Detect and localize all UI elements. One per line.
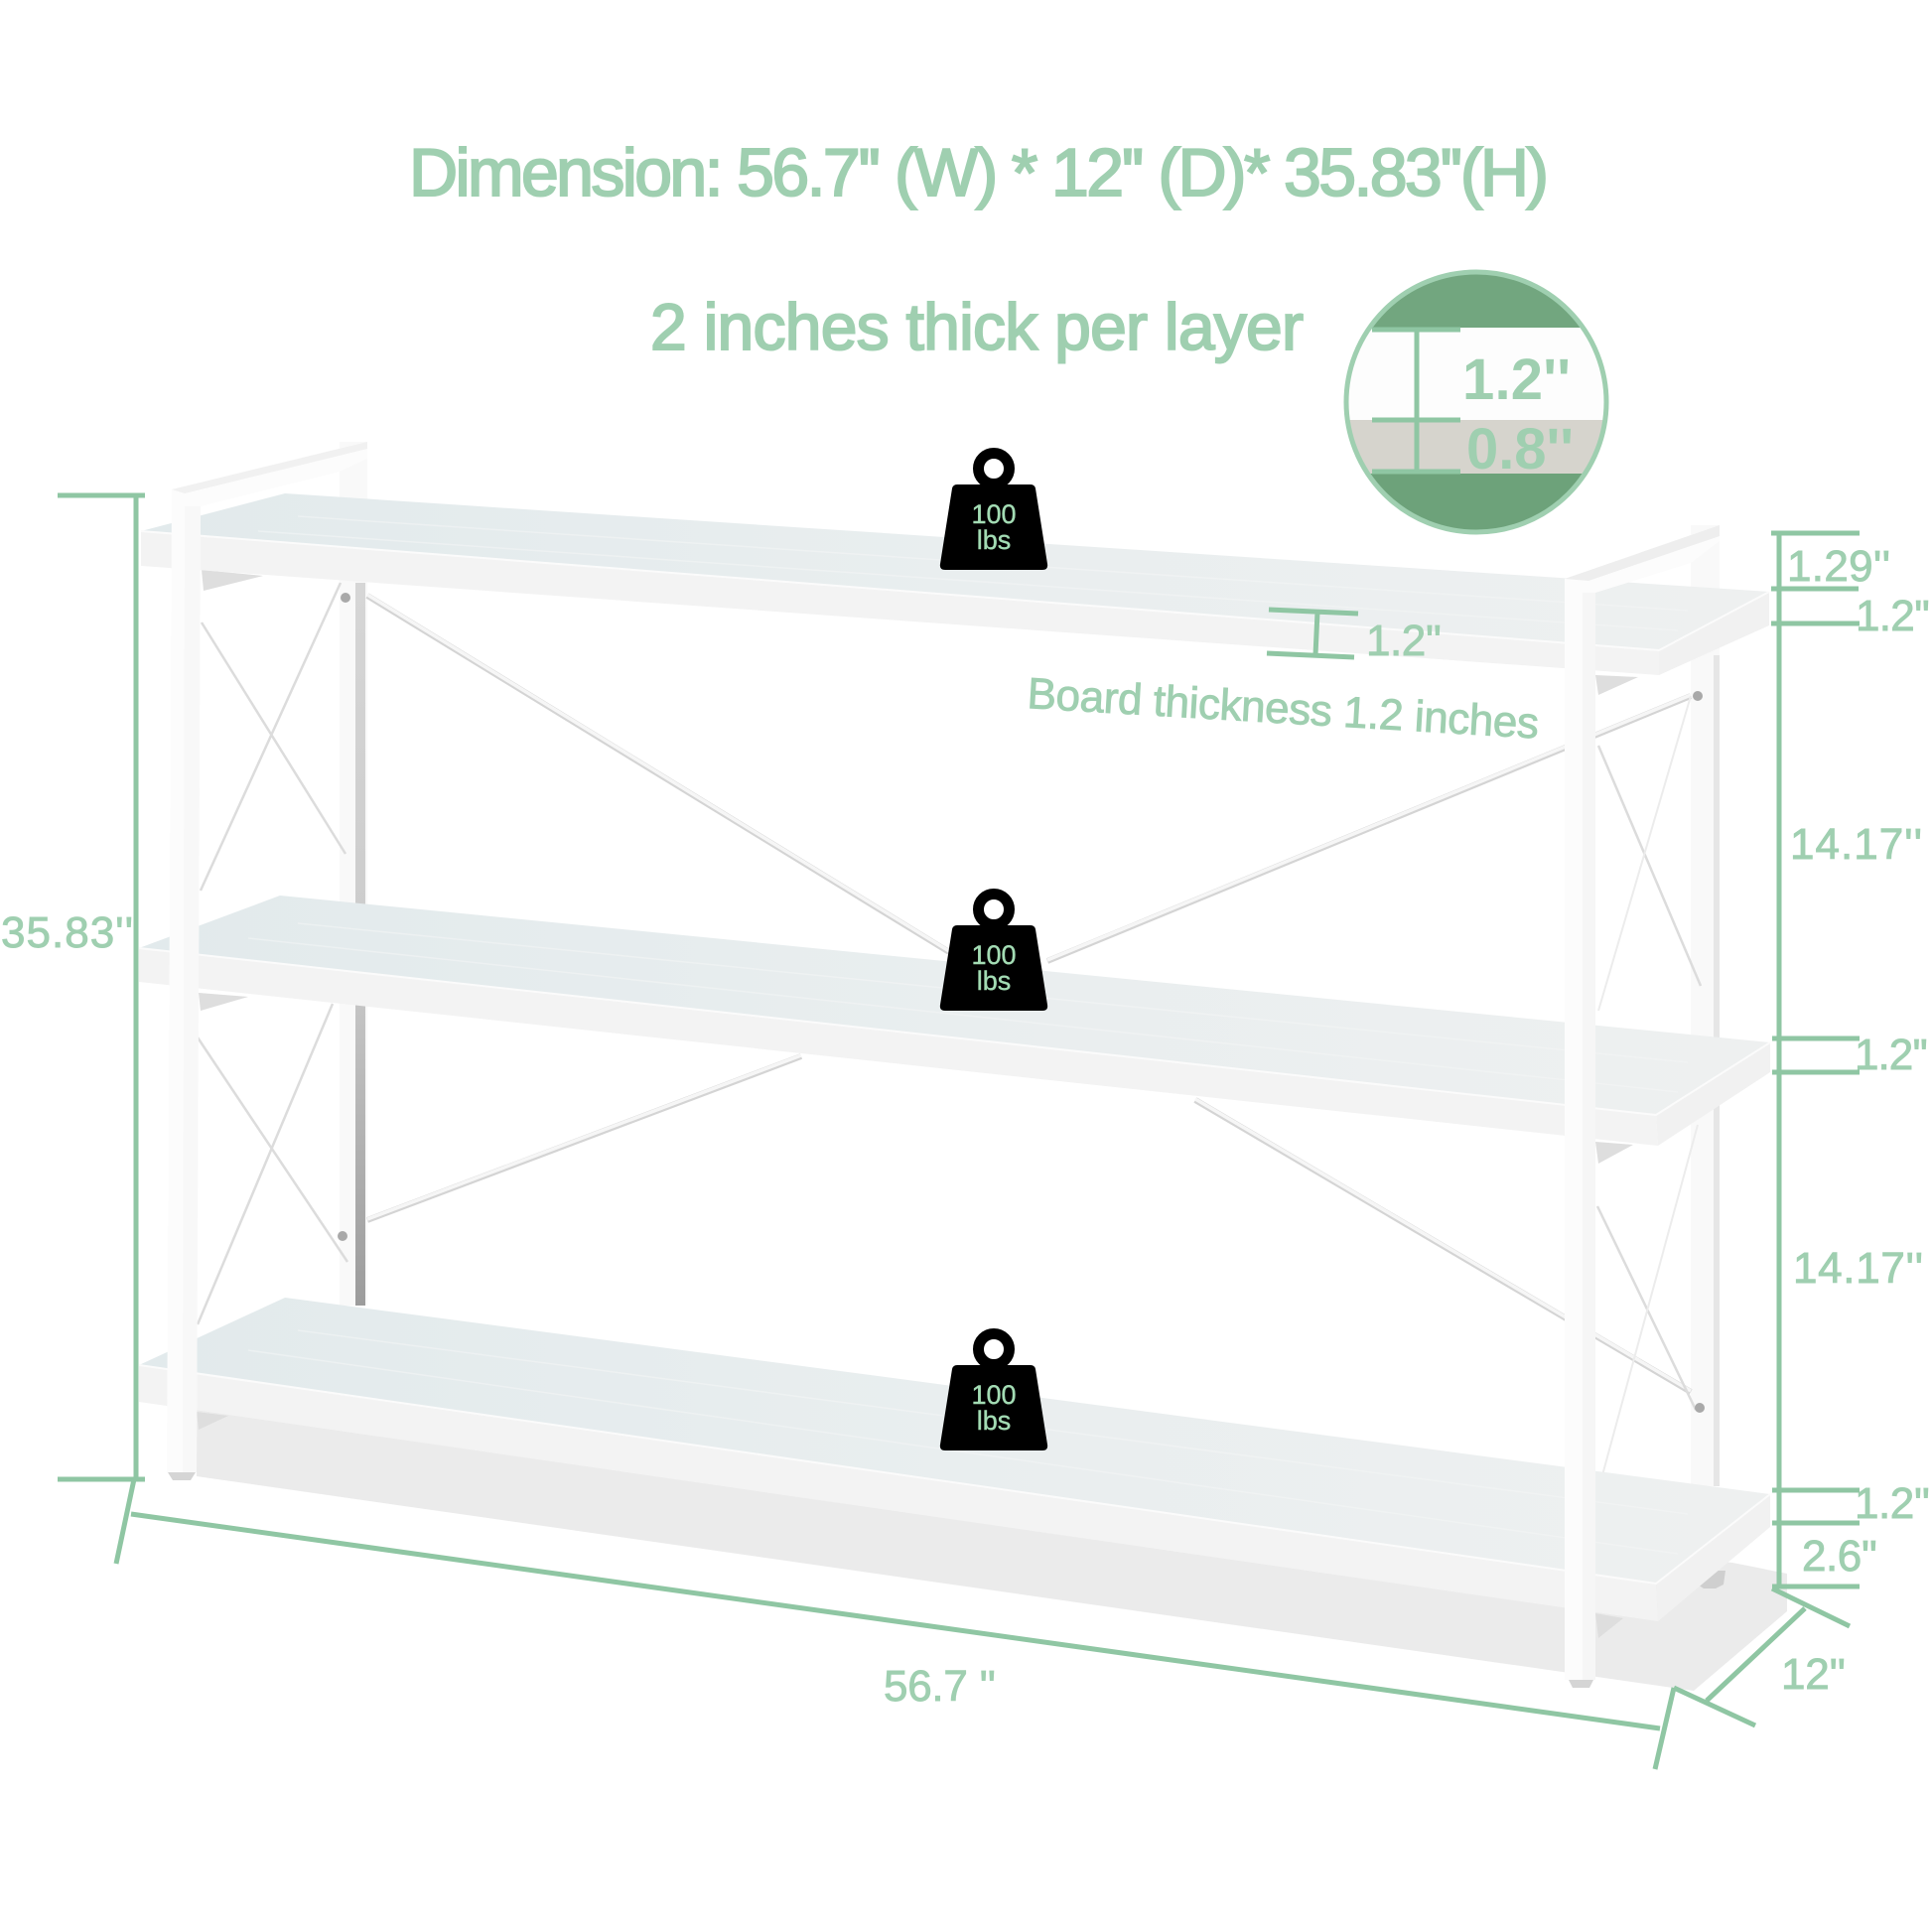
right side height dimensions: 1.2'' [1856, 592, 1930, 640]
floor shadow [197, 1410, 1787, 1691]
weight icon: top shelf 100 lbs [940, 453, 1047, 570]
right side height dimensions: 2.6'' [1802, 1532, 1877, 1581]
back X braces [367, 595, 1691, 1392]
overall width dimension: 56.7 '' [884, 1662, 996, 1711]
back posts of the frame [340, 442, 1725, 1588]
weight icon: bottom shelf 100 lbs [940, 1334, 1047, 1450]
depth dimension [1674, 1588, 1850, 1725]
callout: layer thickness detail circle: 0.8'' [1466, 417, 1574, 482]
board thickness marker: 1.2'' [1366, 617, 1442, 665]
subtitle: thickness per layer: 2 inches thick per layer [650, 290, 1304, 363]
right front post and top rail [1565, 525, 1720, 1688]
right side height dimensions: 14.17'' [1793, 1244, 1923, 1293]
weight icon: bottom shelf 100 lbs: 100 [971, 1380, 1017, 1410]
weight icon: top shelf 100 lbs: 100 [971, 499, 1017, 529]
right side height dimensions: 1.2'' [1855, 1031, 1928, 1079]
bottom shelf [139, 1298, 1770, 1621]
callout: layer thickness detail circle [1340, 268, 1613, 538]
top shelf [141, 493, 1769, 675]
board thickness marker [1267, 610, 1442, 665]
board thickness label: Board thickness 1.2 inches [1026, 669, 1540, 749]
callout: layer thickness detail circle: 1.2'' [1462, 347, 1571, 412]
bolts [338, 593, 1705, 1413]
overall width dimension [116, 1479, 1674, 1769]
right side height dimensions: 1.2'' [1855, 1479, 1930, 1528]
weight icon: top shelf 100 lbs: lbs [977, 525, 1011, 555]
depth dimension: 12'' [1781, 1650, 1846, 1699]
weight icon: bottom shelf 100 lbs: lbs [977, 1406, 1011, 1436]
shelf brackets [197, 570, 1638, 1638]
overall height dimension: 35.83'' [1, 908, 133, 957]
right side height dimensions: 1.29'' [1787, 542, 1890, 591]
side X braces [198, 583, 1701, 1486]
weight icon: middle shelf 100 lbs: 100 [971, 940, 1017, 970]
middle shelf [139, 896, 1770, 1146]
overall height dimension [1, 495, 145, 1479]
left front post and top rail [167, 442, 367, 1480]
title: Dimension: 56.7'' (W) * 12'' (D)* 35.83''(H) [409, 135, 1549, 210]
weight icon: middle shelf 100 lbs: lbs [977, 966, 1011, 996]
right side height dimensions: 14.17'' [1790, 820, 1922, 869]
right side height dimensions [1771, 533, 1930, 1588]
weight icon: middle shelf 100 lbs [940, 894, 1047, 1011]
